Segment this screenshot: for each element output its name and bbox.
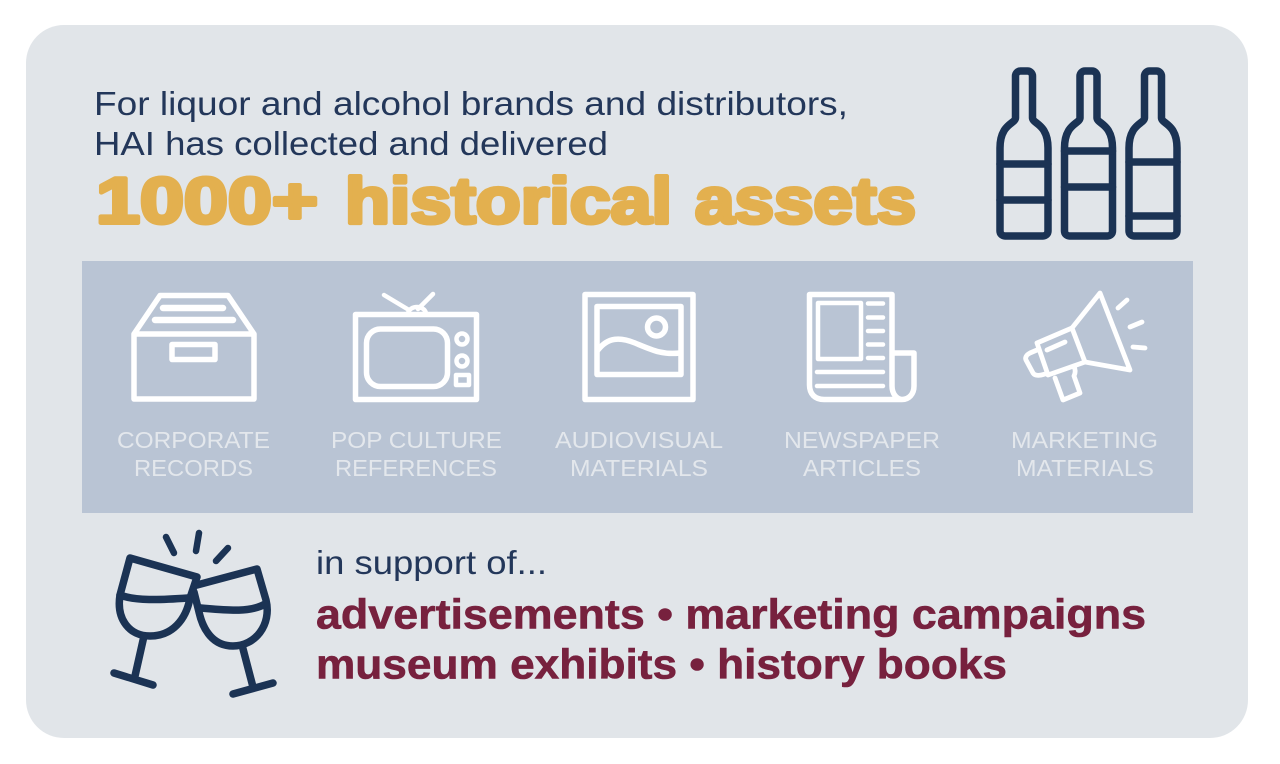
- heading: 1000+ historical assets: 1000+: [96, 164, 318, 237]
- icon: framed picture: [585, 294, 693, 400]
- intro text: [94, 85, 848, 162]
- text: uses of assets: [316, 590, 1146, 688]
- heading: 1000+ historical assets: historical: [345, 164, 672, 237]
- panel: asset types band: [82, 261, 1193, 513]
- label: corporate records: RECORDS: [134, 455, 253, 481]
- icon: television: [356, 294, 476, 400]
- label: pop culture references: POP CULTURE: [331, 427, 502, 453]
- label: marketing materials: MATERIALS: [1016, 455, 1154, 481]
- heading: 1000+ historical assets: [96, 164, 916, 237]
- intro text: For liquor and alcohol brands and distributors,: [94, 85, 848, 122]
- text: in support of: in support of...: [316, 544, 547, 581]
- label: corporate records: CORPORATE: [117, 427, 270, 453]
- label: audiovisual materials: MATERIALS: [570, 455, 708, 481]
- icon: newspaper: [810, 294, 914, 400]
- label: marketing materials: MARKETING: [1011, 427, 1158, 453]
- text: uses of assets: advertisements • marketing campaigns: [316, 590, 1146, 638]
- label: newspaper articles: [784, 427, 940, 481]
- label: newspaper articles: NEWSPAPER: [784, 427, 940, 453]
- label: audiovisual materials: [555, 427, 723, 481]
- intro text: HAI has collected and delivered: [94, 125, 608, 162]
- icon: archive box: [134, 296, 254, 399]
- text: uses of assets: museum exhibits • history books: [316, 640, 1007, 688]
- label: audiovisual materials: AUDIOVISUAL: [555, 427, 723, 453]
- label: pop culture references: [331, 427, 502, 481]
- heading: 1000+ historical assets: assets: [695, 164, 916, 237]
- icon: clinking wine glasses: [114, 533, 273, 694]
- label: marketing materials: [1011, 427, 1158, 481]
- label: pop culture references: REFERENCES: [335, 455, 497, 481]
- label: newspaper articles: ARTICLES: [803, 455, 921, 481]
- label: corporate records: [117, 427, 270, 481]
- icon: megaphone: [1026, 293, 1145, 400]
- icon: three wine bottles: [1000, 71, 1177, 236]
